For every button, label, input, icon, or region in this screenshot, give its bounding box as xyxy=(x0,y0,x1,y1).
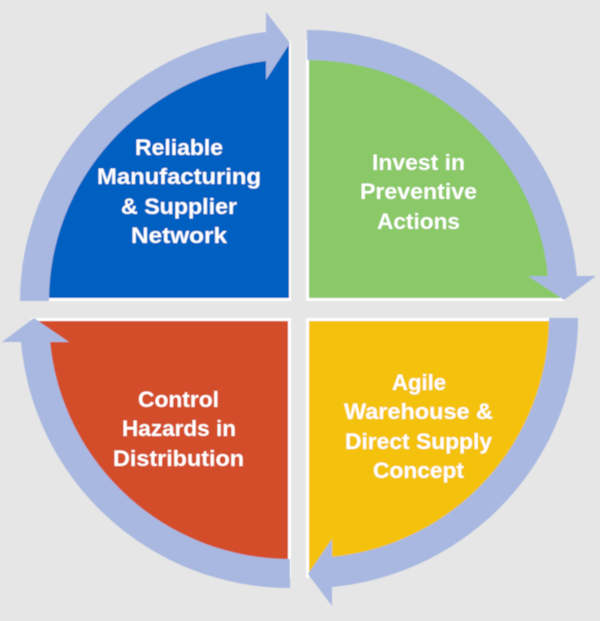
arrow: bottom-right clockwise xyxy=(308,318,578,606)
label: reliable manufacturing: Reliable xyxy=(135,135,223,160)
panel: agile warehouse xyxy=(306,318,578,606)
label: invest in preventive actions: Actions xyxy=(377,209,460,234)
label: agile warehouse: Warehouse & xyxy=(344,399,493,424)
label: reliable manufacturing: & Supplier xyxy=(121,194,237,219)
panel: reliable manufacturing xyxy=(20,12,291,301)
label: control hazards: Control xyxy=(138,387,219,412)
label: control hazards: Distribution xyxy=(113,446,244,471)
label: agile warehouse: Direct Supply xyxy=(345,429,492,454)
arrow: bottom-left clockwise xyxy=(2,318,290,588)
label: agile warehouse: Concept xyxy=(373,458,465,483)
label: invest in preventive actions xyxy=(360,150,477,234)
panel: invest in preventive actions xyxy=(306,30,596,301)
label: reliable manufacturing xyxy=(97,135,261,248)
label: invest in preventive actions: Preventive xyxy=(360,179,477,204)
label: agile warehouse xyxy=(344,370,493,483)
arrow: top-right clockwise xyxy=(307,30,596,300)
label: control hazards xyxy=(113,387,244,471)
label: invest in preventive actions: Invest in xyxy=(372,150,465,175)
panel: control hazards xyxy=(2,318,291,588)
label: reliable manufacturing: Network xyxy=(131,223,228,248)
arrow: top-left clockwise xyxy=(20,12,290,301)
label: agile warehouse: Agile xyxy=(392,370,446,395)
label: reliable manufacturing: Manufacturing xyxy=(97,164,261,189)
label: control hazards: Hazards in xyxy=(122,416,236,441)
